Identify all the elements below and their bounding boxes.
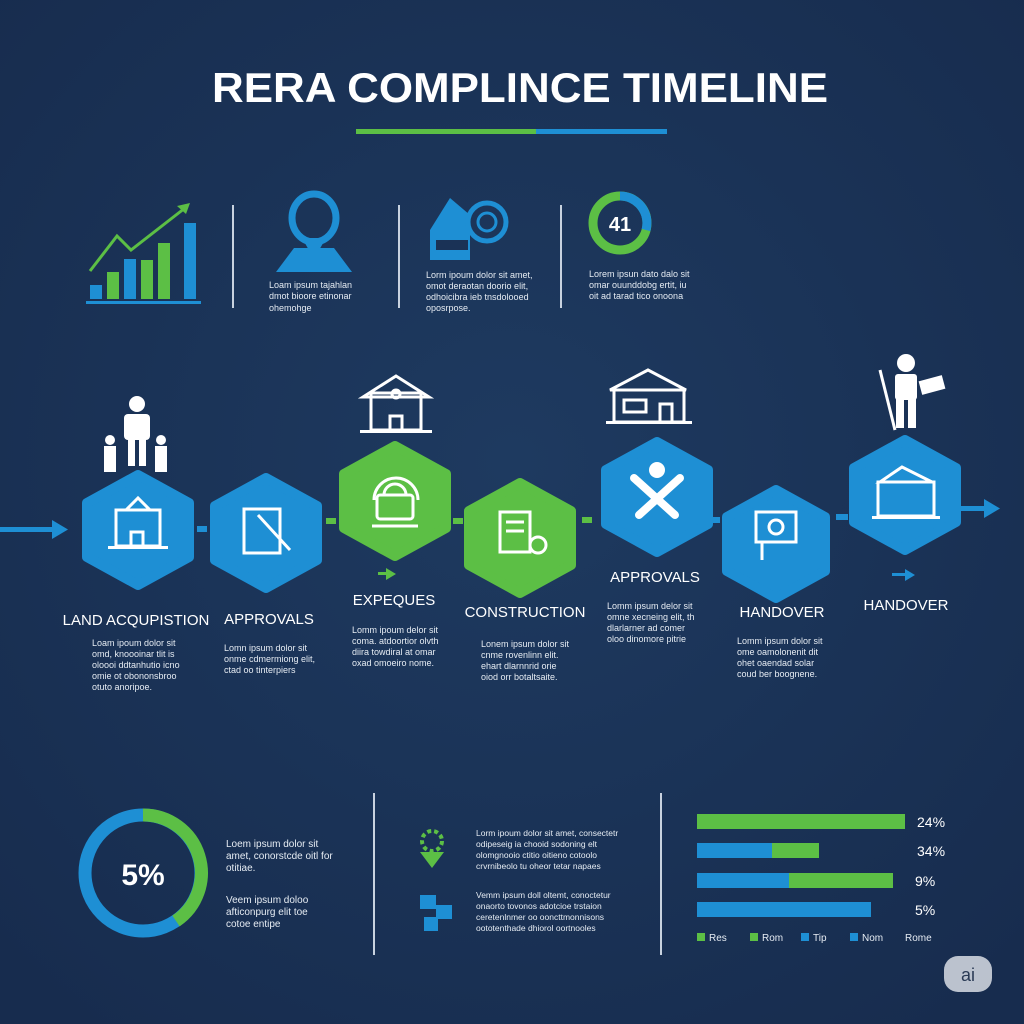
icon: family	[104, 396, 167, 472]
step 5: approvals: omne xecneing elit, th	[607, 612, 695, 622]
legend: Res	[709, 933, 727, 944]
step 2: approvals: Lomn ipsum dolor sit	[224, 643, 308, 653]
step 1: land acquisition: oloooi ddtanhutio icno	[92, 660, 180, 670]
step 3: expeques: EXPEQUES	[353, 592, 435, 609]
step 1: land acquisition	[63, 396, 209, 692]
icon: school building	[363, 376, 429, 430]
step 4: construction: cnme rovenlinn elit.	[481, 650, 559, 660]
title: RERA COMPLINCE TIMELINE	[212, 64, 828, 111]
text block: donut: otitiae.	[226, 863, 255, 874]
text block 2: oposrpose.	[426, 303, 471, 313]
step 6: handover: coud ber boognene.	[737, 669, 817, 679]
text block: donut: afticonpurg elit toe	[226, 907, 308, 918]
legend: Tip	[813, 933, 827, 944]
text block 1: Loam ipsum tajahlan	[269, 280, 352, 290]
text block: donut: cotoe entipe	[226, 919, 281, 930]
step 6: handover: ohet oaendad solar	[737, 658, 814, 668]
text block 1: dmot bioore etinonar	[269, 291, 352, 301]
icon: worker	[880, 354, 945, 430]
step 7: handover: HANDOVER	[863, 597, 949, 614]
bar chart: 9%	[915, 873, 935, 889]
text block 1: ohemohge	[269, 303, 312, 313]
step 1: land acquisition: omie ot obononsbroo	[92, 671, 177, 681]
legend: Rome	[905, 933, 932, 944]
donut chart 5%: 5%	[121, 859, 165, 892]
step 3: expeques: oxad omoeiro nome.	[352, 658, 434, 668]
bar chart: 34%	[917, 843, 945, 859]
arrow: timeline end	[960, 499, 1000, 518]
step 1: land acquisition: LAND ACQUPISTION	[63, 612, 209, 629]
legend: Rom	[762, 933, 783, 944]
legend	[697, 933, 932, 944]
step 1: land acquisition: omd, knoooinar tlit is	[92, 649, 175, 659]
badge: ai	[944, 956, 992, 992]
icon: donut 41: 41	[609, 214, 631, 236]
step 4: construction: CONSTRUCTION	[465, 604, 585, 621]
text block: bottom middle 2: ceretenlnmer oo ooncttmonnisons	[476, 912, 604, 922]
step 6: handover	[727, 490, 825, 679]
step 4: construction	[465, 483, 585, 682]
badge: ai: ai	[961, 965, 975, 985]
icon: location pin	[276, 194, 352, 272]
step 6: handover: Lomm ipsum dolor sit	[737, 636, 823, 646]
icon: house	[610, 370, 686, 422]
step 4: construction: oiod orr botaltsaite.	[481, 672, 558, 682]
step 6: handover: ome oamolonenit dit	[737, 647, 819, 657]
step 7: handover	[854, 354, 956, 614]
step 3: expeques: diira towdiral at omar	[352, 647, 436, 657]
step 4: construction: ehart dlarnnrid orie	[481, 661, 557, 671]
step 3: expeques: Lomm ipoum delor sit	[352, 625, 439, 635]
icon: donut 41	[593, 196, 647, 250]
donut chart 5%	[85, 815, 201, 931]
text block: bottom middle 1: crvrnibeolo tu oheor tetar napaes	[476, 861, 601, 871]
step 2: approvals: APPROVALS	[224, 611, 314, 628]
text block: donut: amet, conorstcde oitl for	[226, 851, 333, 862]
step 1: land acquisition: otuto anoripoe.	[92, 682, 152, 692]
step 6: handover: HANDOVER	[739, 604, 825, 621]
connectors	[197, 514, 848, 532]
text block: bottom middle 1: odipeseig ia chooid sodoning elt	[476, 839, 598, 849]
step 3: expeques: coma. atdoortior olvth	[352, 636, 439, 646]
step 3: expeques	[344, 376, 446, 668]
text block 3: omar ouunddobg ertit, iu	[589, 280, 687, 290]
text block 3: oit ad tarad tico onoona	[589, 291, 683, 301]
step 2: approvals: onme cdmermiong elit,	[224, 654, 315, 664]
text block: bottom middle 2: oototenthade dhiorol oortnooles	[476, 923, 596, 933]
text block: bottom middle 2: onaorto tovonos adotcioe trstaion	[476, 901, 602, 911]
text block 3: Lorem ipsun dato dalo sit	[589, 269, 690, 279]
icon: bar chart growth	[86, 203, 201, 304]
text block 2: odhoicibra ieb tnsdolooed	[426, 292, 529, 302]
step 5: approvals: APPROVALS	[610, 569, 700, 586]
step 4: construction: Lonem ipsum dolor sit	[481, 639, 570, 649]
icon: puzzle	[420, 895, 452, 931]
bar chart: 24%	[917, 814, 945, 830]
step 2: approvals: ctad oo tinterpiers	[224, 665, 296, 675]
legend: Nom	[862, 933, 883, 944]
text block: donut: Veem ipsum doloo	[226, 895, 309, 906]
bar chart: 5%	[915, 902, 935, 918]
text block: bottom middle 2: Vemm ipsum doll oltemt, conoctetur	[476, 890, 611, 900]
title underline	[356, 129, 667, 134]
step 5: approvals: Lomm ipsum delor sit	[607, 601, 693, 611]
step 5: approvals	[606, 370, 708, 644]
step 5: approvals: dlarlarner ad comer	[607, 623, 685, 633]
text block 2: Lorm ipoum dolor sit amet,	[426, 270, 533, 280]
step 1: land acquisition: Loam ipoum dolor sit	[92, 638, 176, 648]
icon: building and wheel	[430, 198, 506, 260]
bar chart	[697, 814, 945, 944]
text block: bottom middle 1: Lorm ipoum dolor sit amet, consectetr	[476, 828, 618, 838]
text block 2: omot deraotan doorio elit,	[426, 281, 528, 291]
step 5: approvals: oloo dinomore pitrie	[607, 634, 686, 644]
text block: donut: Loem ipsum dolor sit	[226, 839, 318, 850]
step 2: approvals	[215, 478, 317, 675]
icon: gear pin	[420, 831, 444, 868]
arrow: timeline start	[0, 520, 68, 539]
text block: bottom middle 1: olomgnooio ctitio oitieno cotoolo	[476, 850, 597, 860]
